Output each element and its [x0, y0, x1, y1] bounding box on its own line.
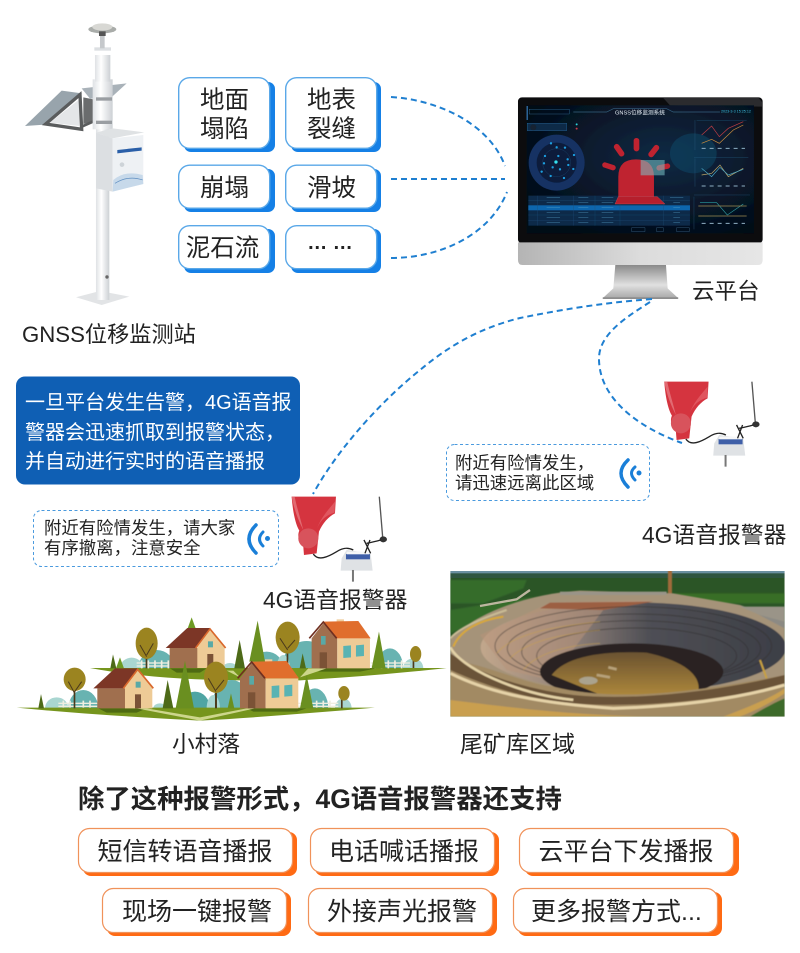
lower fences [58, 701, 338, 708]
screen dashboard [527, 105, 754, 233]
tag: ground collapse: 塌陷 [200, 115, 249, 143]
callout: village voice message [34, 510, 278, 566]
fences [137, 660, 410, 668]
tag: collapse [179, 165, 275, 212]
antenna [364, 497, 387, 553]
heading: other alarm modes: 除了这种报警形式，4G语音报警器还支持 [78, 784, 562, 814]
button: more modes [514, 888, 722, 936]
icon: solar panel [25, 83, 127, 129]
trees front [38, 661, 350, 708]
icon: signal waves [249, 525, 270, 553]
icon: monitor cloud platform [518, 97, 763, 299]
callout: platform alarm note: 一旦平台发生告警，4G语音报 [25, 391, 292, 414]
arrow: dashed links from tags to cloud platform [391, 97, 507, 258]
tag: ground collapse [179, 78, 275, 152]
caption: tailings area: 尾矿库区域 [460, 731, 575, 757]
trees back [110, 617, 421, 668]
tag: surface fissure [286, 78, 381, 152]
GNSS monitoring station [25, 23, 144, 305]
callout: platform alarm note: 并自动进行实时的语音播报 [25, 450, 265, 473]
caption: village: 小村落 [172, 731, 240, 757]
button: one-key alarm: 现场一键报警 [122, 898, 272, 926]
panel: hazard tags [179, 78, 381, 273]
lower ground [17, 708, 375, 721]
monitor stand [603, 265, 678, 299]
button: SMS to voice [78, 828, 297, 876]
tag: debris flow: 泥石流 [186, 234, 259, 262]
screen dashboard: GNSS位移监测系统 [615, 108, 665, 116]
upper ground [90, 668, 447, 680]
icon: pole [76, 33, 129, 305]
tag: more [286, 226, 381, 273]
button: phone shout [310, 828, 499, 876]
screen dashboard: 2023-3-3 15:25:12 [721, 110, 751, 114]
button: cloud broadcast: 云平台下发播报 [538, 838, 714, 866]
button: SMS to voice: 短信转语音播报 [97, 838, 273, 866]
button: external sound and light: 外接声光报警 [327, 898, 477, 926]
caption: cloud platform: 云平台 [692, 279, 760, 304]
hills upper [122, 641, 424, 668]
tag: more: … … [307, 232, 353, 254]
tag: surface fissure: 裂缝 [307, 115, 356, 143]
callout: tailings voice message: 请迅速远离此区域 [455, 473, 594, 493]
tag: surface fissure: 地表 [307, 86, 356, 114]
arrow: dashed links from platform to alarms [313, 299, 682, 494]
button: cloud broadcast [520, 828, 739, 876]
callout: platform alarm note [16, 376, 300, 484]
tag: landslide: 滑坡 [307, 174, 356, 202]
icon: 4G voice alarm, village [292, 497, 387, 582]
house: orange roof upper [309, 619, 371, 668]
house: dark roof upper [166, 628, 226, 668]
button: external sound and light [308, 888, 497, 936]
cable [313, 548, 353, 558]
icon: control box [96, 128, 144, 192]
callout: village voice message: 有序撤离，注意安全 [44, 538, 201, 558]
button: one-key alarm [102, 888, 291, 936]
house: dark roof lower [93, 668, 153, 708]
icon: 4G voice alarm, platform side [664, 382, 760, 467]
callout: tailings voice message [446, 444, 650, 500]
button: phone shout: 电话喊话播报 [329, 838, 479, 866]
tag: ground collapse: 地面 [200, 86, 249, 114]
caption: GNSS station: GNSS位移监测站 [22, 322, 196, 347]
monitor body [518, 97, 763, 265]
tag: debris flow [179, 226, 275, 273]
village illustration [17, 618, 446, 721]
transmitter module [341, 550, 373, 582]
image: tailings open pit mine [450, 563, 786, 717]
icon: red alarm siren [601, 138, 671, 204]
callout: village voice message: 附近有险情发生，请大家 [44, 518, 235, 538]
button: more modes: 更多报警方式... [531, 898, 702, 926]
hills lower [45, 680, 352, 708]
callout: platform alarm note: 警器会迅速抓取到报警状态， [25, 421, 285, 444]
house: orange roof lower [238, 659, 299, 708]
tag: landslide [286, 165, 381, 212]
callout: tailings voice message: 附近有险情发生， [455, 453, 594, 473]
icon: signal waves [621, 460, 642, 487]
caption: tailings alarm: 4G语音报警器 [642, 522, 787, 548]
horn speaker [292, 497, 336, 555]
caption: village alarm: 4G语音报警器 [263, 587, 408, 613]
panel: alarm mode buttons [78, 828, 739, 936]
tag: collapse: 崩塌 [200, 174, 249, 202]
icon: GNSS antenna [88, 23, 116, 36]
